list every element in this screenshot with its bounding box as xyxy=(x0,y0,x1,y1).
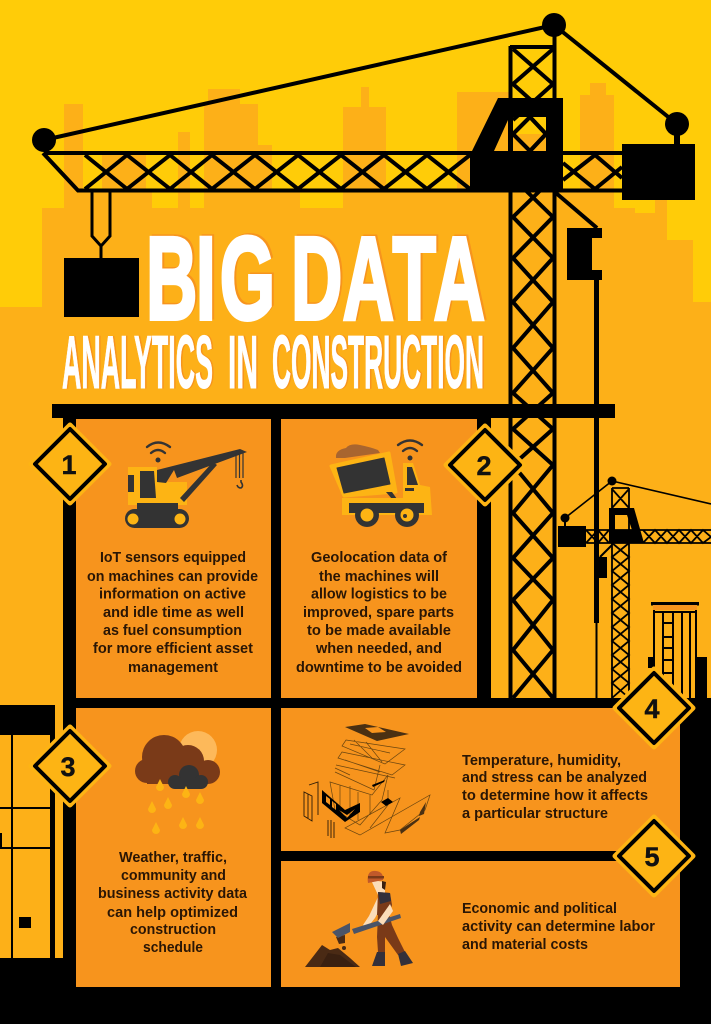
text: point 3: Weather, traffic, xyxy=(119,850,227,866)
jib lattice xyxy=(43,153,622,190)
text: point 3: can help optimized xyxy=(107,905,238,921)
title shadow: ANALYTICS xyxy=(64,320,214,404)
text: point 2: the machines will xyxy=(319,569,439,585)
badge 5: 5 xyxy=(644,842,660,872)
panel 2 xyxy=(281,419,477,698)
title shadow xyxy=(64,211,487,404)
title shadow: IN xyxy=(230,320,260,404)
small background crane xyxy=(558,476,711,700)
hook rope xyxy=(92,191,110,258)
text: point 2: allow logistics to be xyxy=(311,586,447,602)
panel 5 xyxy=(281,861,680,987)
operator cabin xyxy=(470,98,563,192)
text: point 4 xyxy=(462,753,648,822)
trolley line and block xyxy=(556,193,597,228)
text: point 3: business activity data xyxy=(98,886,248,902)
text: point 3: construction xyxy=(130,922,216,938)
text: point 1: on machines can provide xyxy=(87,569,258,585)
icon: dump truck with wifi xyxy=(331,440,432,527)
text: point 2: improved, spare parts xyxy=(303,605,454,621)
icon: crawler crane with wifi xyxy=(125,442,247,528)
text: point 1: management xyxy=(128,660,218,676)
badge 1: 1 xyxy=(61,450,77,480)
text: point 3: community and xyxy=(121,868,226,884)
text: point 1 xyxy=(87,550,258,676)
text: point 4: Temperature, humidity, xyxy=(462,753,621,769)
badge 4 xyxy=(615,669,693,747)
badge 2 xyxy=(446,426,524,504)
text: point 1: IoT sensors equipped xyxy=(100,550,246,566)
text: point 2 xyxy=(296,550,462,676)
text: point 1: as fuel consumption xyxy=(103,623,242,639)
panel 1 xyxy=(76,419,271,698)
panel 3 xyxy=(76,708,271,987)
text: point 2: when needed, and xyxy=(315,641,442,657)
main tower crane xyxy=(32,13,695,700)
title main: BIG DATA xyxy=(146,212,485,344)
text: point 1: and idle time as well xyxy=(103,605,244,621)
text: point 2: to be made available xyxy=(307,623,451,639)
icon: rain cloud and sun xyxy=(135,731,220,834)
text: point 1: for more efficient asset xyxy=(93,641,253,657)
cables xyxy=(44,25,677,140)
text: point 2: downtime to be avoided xyxy=(296,660,462,676)
text: point 4: and stress can be analyzed xyxy=(462,770,647,786)
badge 3: 3 xyxy=(60,752,76,782)
icon: worker with shovel xyxy=(305,871,413,967)
title main: IN xyxy=(228,320,258,404)
title main xyxy=(62,212,485,404)
panel 4 xyxy=(281,708,680,851)
building frame xyxy=(0,404,711,1024)
left building xyxy=(0,705,55,958)
badge 5 xyxy=(615,817,693,895)
counterweight xyxy=(622,134,695,200)
text: point 5: Economic and political xyxy=(462,901,617,917)
title xyxy=(62,211,487,404)
top pulley xyxy=(542,13,566,37)
title shadow: BIG DATA xyxy=(148,211,487,343)
text: point 5 xyxy=(462,901,655,953)
cabin window lattice xyxy=(513,117,546,151)
badge 1 xyxy=(31,425,109,503)
tower mast xyxy=(510,25,554,700)
text: point 5: activity can determine labor xyxy=(462,919,655,935)
text: point 1: information on active xyxy=(99,586,246,602)
hanging block xyxy=(64,258,139,317)
text: point 3 xyxy=(98,850,248,956)
small building under construction xyxy=(648,602,707,700)
rain drops xyxy=(148,779,204,834)
text: point 3: schedule xyxy=(143,940,203,956)
text: point 2: Geolocation data of xyxy=(311,550,447,566)
counterweight pulley xyxy=(665,112,689,136)
badge 2: 2 xyxy=(476,451,492,481)
text: point 5: and material costs xyxy=(462,937,588,953)
text: point 4: to determine how it affects xyxy=(462,788,648,804)
title main: ANALYTICS xyxy=(62,320,213,404)
vertical pole xyxy=(594,280,599,700)
jib end pulley xyxy=(32,128,56,152)
text: point 4: a particular structure xyxy=(462,806,608,822)
badge 3 xyxy=(31,727,109,805)
badge 4: 4 xyxy=(644,694,660,724)
icon: exploded building model xyxy=(304,724,430,838)
